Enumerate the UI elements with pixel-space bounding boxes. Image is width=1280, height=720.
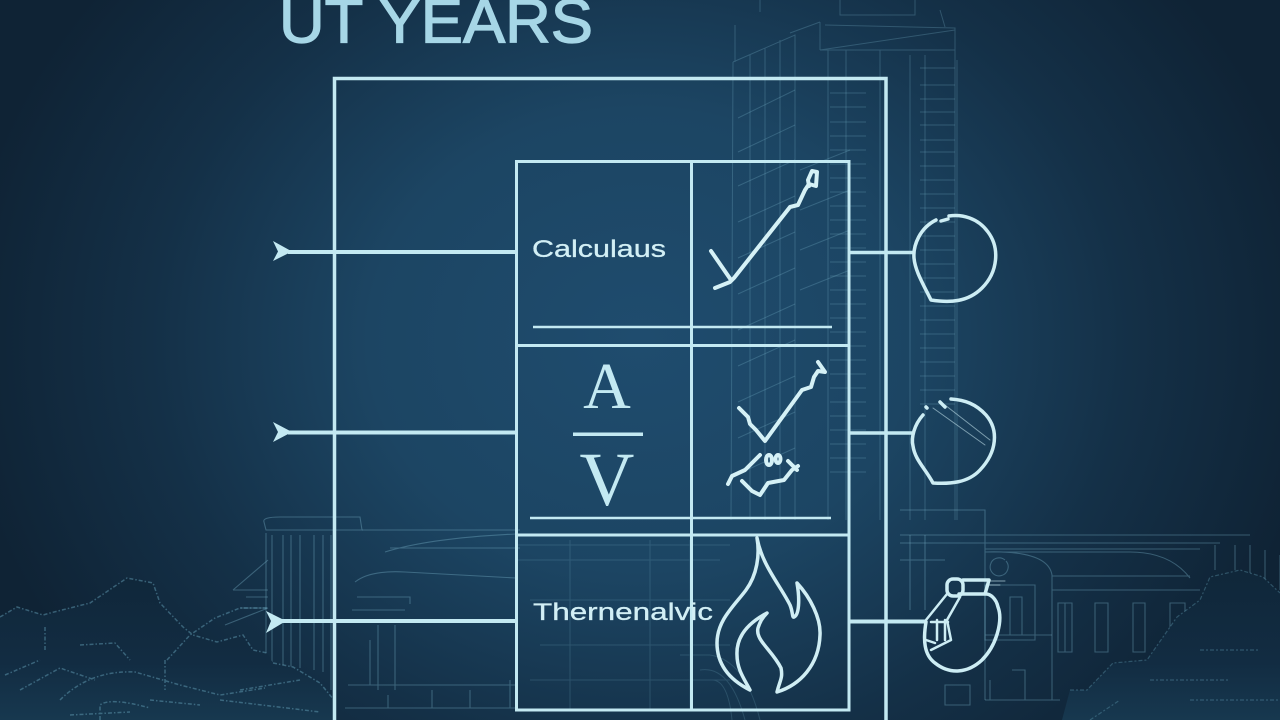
connector 2 xyxy=(849,431,912,435)
row 2 fraction symbol: V xyxy=(580,438,635,522)
central table xyxy=(516,161,849,710)
icon: rising check chart 1 xyxy=(711,171,817,288)
trees left xyxy=(0,578,334,720)
sketch: building behind table row 3 xyxy=(516,540,760,720)
arrow: input 2 xyxy=(273,422,516,442)
row 2 fraction symbol: A xyxy=(583,350,631,423)
sketch: right wing of campus building xyxy=(900,510,1280,705)
icon: rising check chart 2 xyxy=(728,362,825,495)
connector 1 xyxy=(849,251,914,254)
sketch: left wing of campus building xyxy=(225,517,520,708)
icon: output circle 2 xyxy=(912,399,994,483)
row 3 label: Thernenalvic xyxy=(533,599,713,626)
row 1 label: Calculaus xyxy=(532,236,666,263)
sketch: university tower xyxy=(731,0,957,520)
trees right xyxy=(1062,570,1280,720)
icon: output circle 1 xyxy=(914,216,996,301)
outer frame xyxy=(334,78,886,720)
icon: flame xyxy=(717,538,820,692)
row 2 fraction symbol xyxy=(573,350,643,522)
connector 3 xyxy=(849,620,926,624)
icon: output circle 3 xyxy=(925,579,1005,671)
arrow: input 3 xyxy=(266,611,516,633)
arrow: input 1 xyxy=(273,241,516,261)
